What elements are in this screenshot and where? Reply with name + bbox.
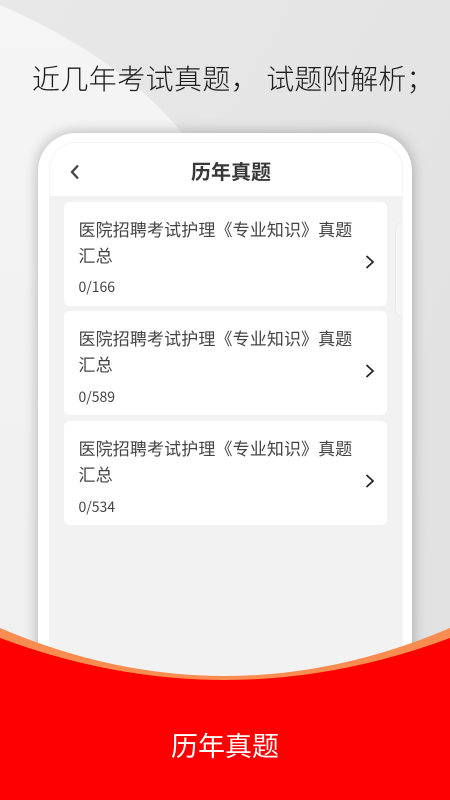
app header [50, 143, 402, 196]
icon: chevron [366, 474, 374, 488]
panel: phone screen [50, 143, 402, 753]
card 3 [64, 421, 387, 525]
footer label: 历年真题 [171, 725, 279, 764]
title: 近几年考试真题，试题附解析； [32, 58, 434, 98]
card 1 [64, 202, 387, 306]
card 3 title: 汇总 [78, 460, 113, 486]
side card peek [395, 222, 417, 318]
icon: chevron [366, 364, 374, 378]
card 1 title: 医院招聘考试护理《专业知识》真题 [78, 216, 352, 240]
card 2 progress: 0/589 [78, 387, 115, 407]
card 1 title: 汇总 [78, 242, 113, 266]
card 2 title [78, 324, 352, 376]
card 2 [64, 311, 387, 415]
card 3 title: 医院招聘考试护理《专业知识》真题 [78, 434, 352, 460]
card 2 title: 医院招聘考试护理《专业知识》真题 [78, 324, 352, 350]
icon: back arrow [70, 164, 79, 180]
card 1 progress: 0/166 [78, 277, 115, 297]
icon: chevron [366, 255, 374, 269]
card list [64, 202, 387, 525]
heading: 历年真题 [191, 156, 271, 185]
card 3 progress: 0/534 [78, 497, 115, 517]
card 1 title [78, 216, 352, 266]
panel: phone mockup [38, 133, 412, 753]
card 2 title: 汇总 [78, 350, 113, 376]
card 3 title [78, 434, 352, 486]
